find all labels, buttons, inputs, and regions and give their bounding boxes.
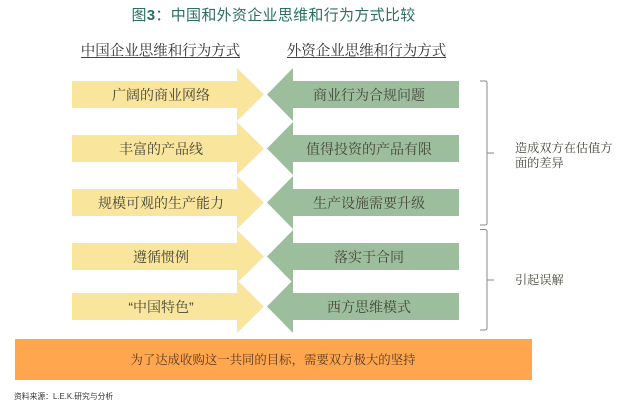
text: valuation differences: 面的差异 bbox=[515, 155, 564, 170]
arrow: limited investable products bbox=[267, 122, 459, 175]
arrow: Chinese characteristics: “中国特色” bbox=[128, 299, 194, 315]
arrow: rich product line bbox=[72, 122, 264, 175]
heading: foreign companies: 外资企业思维和行为方式 bbox=[287, 42, 446, 60]
arrow: considerable scale bbox=[72, 176, 264, 229]
arrow: Western thinking bbox=[267, 280, 459, 333]
arrow: follow conventions bbox=[72, 230, 264, 283]
arrow: considerable scale: 规模可观的生产能力 bbox=[98, 195, 224, 211]
arrow: business compliance: 商业行为合规问题 bbox=[313, 87, 425, 103]
arrow: facilities need upgrading: 生产设施需要升级 bbox=[313, 195, 425, 211]
banner: shared goal bbox=[15, 339, 532, 380]
arrow: implement contract bbox=[267, 230, 459, 283]
arrow: implement contract: 落实于合同 bbox=[334, 249, 404, 265]
source note: 资料来源：L.E.K.研究与分析 bbox=[14, 391, 113, 401]
arrow: broad business network bbox=[72, 68, 264, 121]
arrow: follow conventions: 遵循惯例 bbox=[133, 249, 189, 265]
arrow: rich product line: 丰富的产品线 bbox=[119, 141, 203, 157]
heading: Chinese companies: 中国企业思维和行为方式 bbox=[81, 42, 240, 60]
title: 图3：中国和外资企业思维和行为方式比较 bbox=[131, 6, 416, 24]
arrow: facilities need upgrading bbox=[267, 176, 459, 229]
text: misunderstanding: 引起误解 bbox=[515, 272, 564, 287]
bracket: misunderstanding bbox=[480, 230, 494, 330]
arrow: Western thinking: 西方思维模式 bbox=[327, 299, 411, 315]
bracket: valuation differences bbox=[480, 81, 494, 225]
arrow: Chinese characteristics bbox=[72, 280, 264, 333]
arrow: business compliance bbox=[267, 68, 459, 121]
arrow: broad business network: 广阔的商业网络 bbox=[112, 87, 210, 103]
arrow: limited investable products: 值得投资的产品有限 bbox=[306, 141, 432, 157]
banner: shared goal: 为了达成收购这一共同的目标，需要双方极大的坚持 bbox=[131, 352, 415, 367]
text: valuation differences: 造成双方在估值方 bbox=[515, 140, 612, 155]
